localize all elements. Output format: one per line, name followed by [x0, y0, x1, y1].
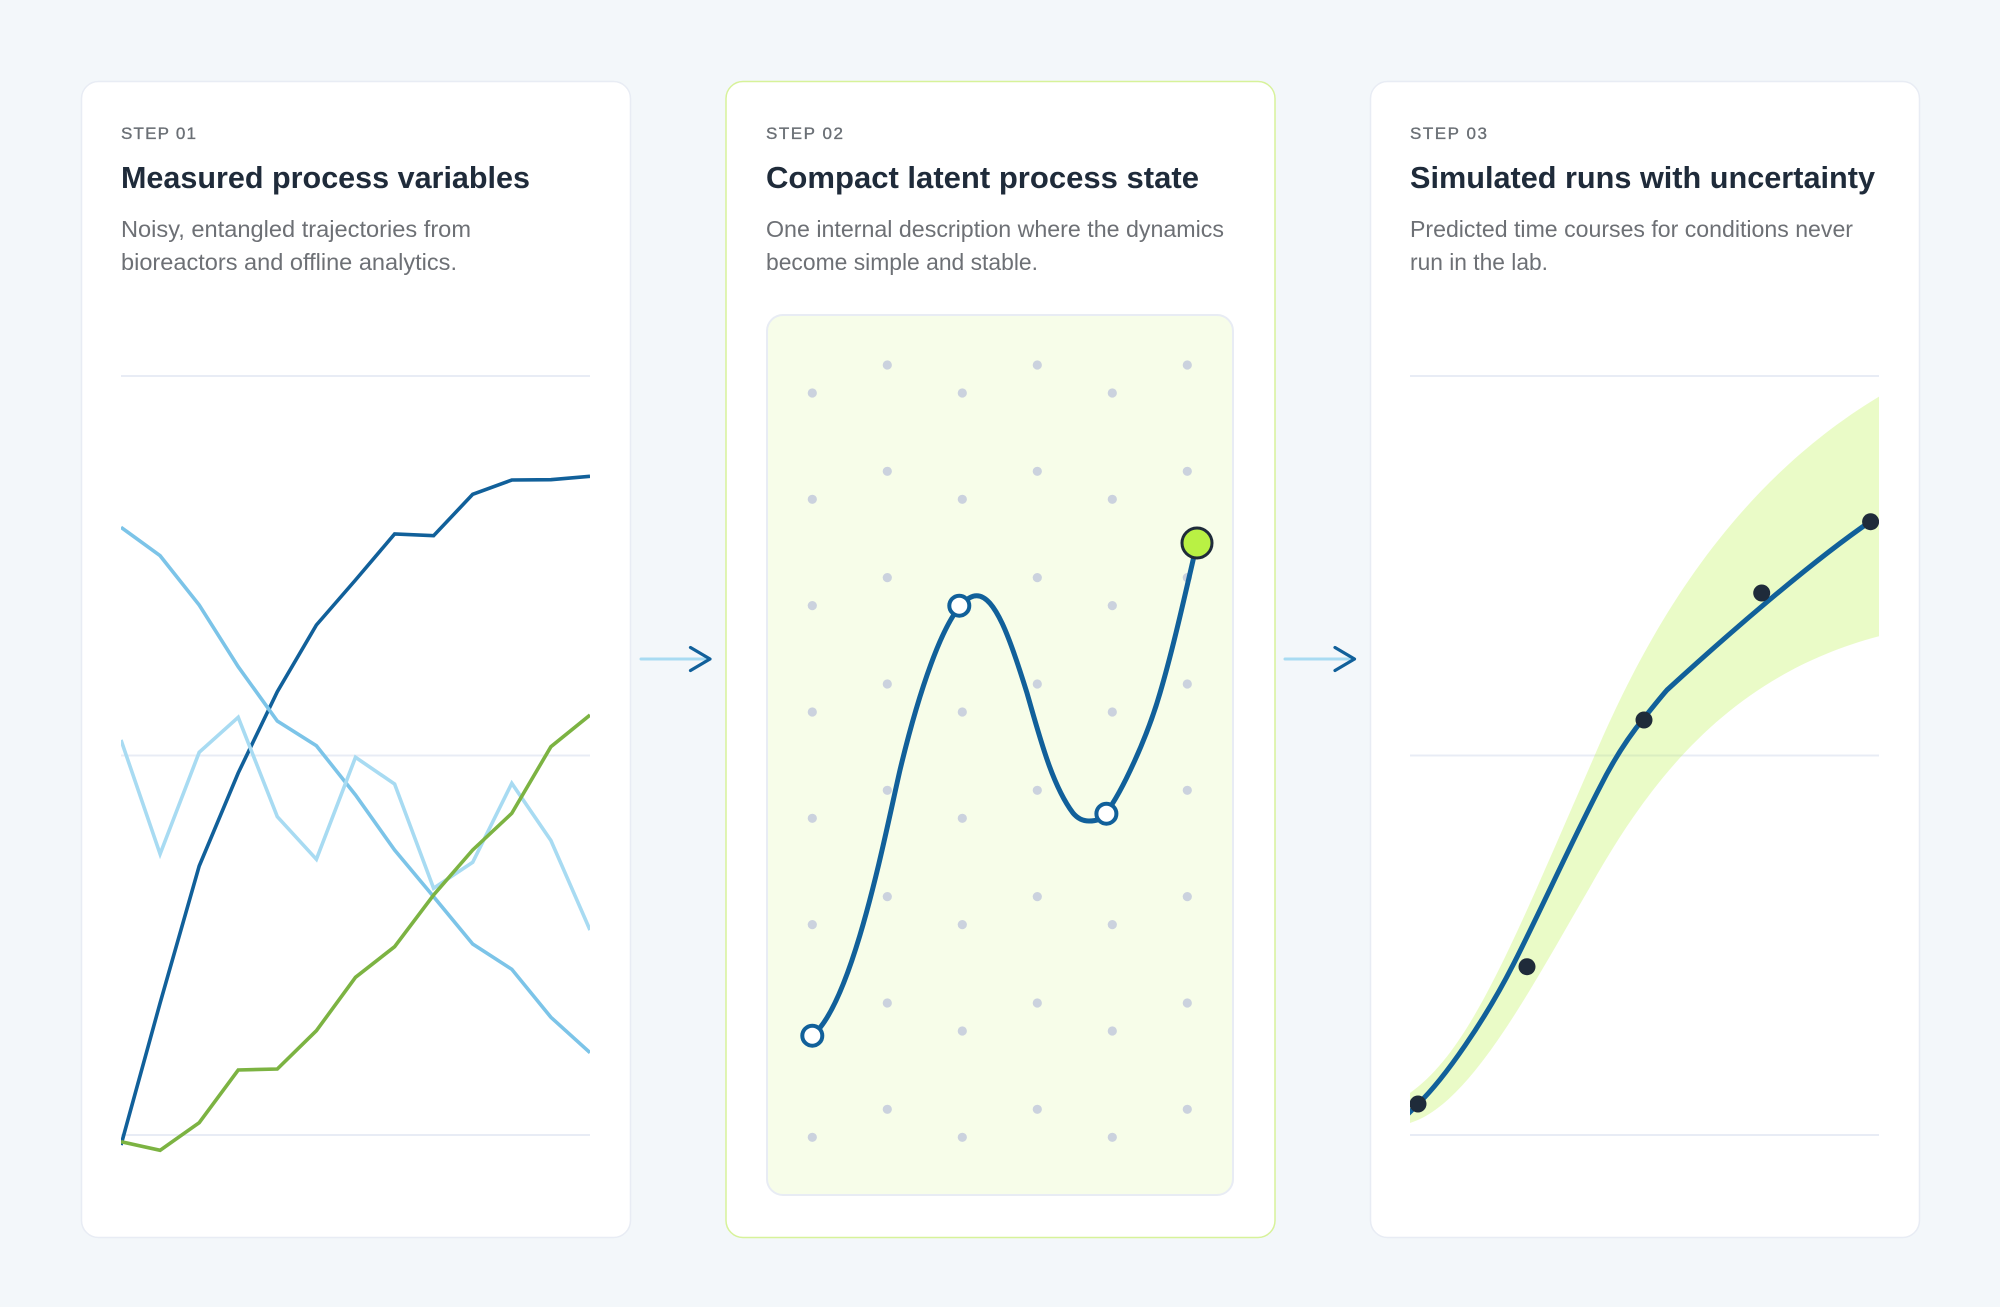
heading: measured process variables: Measured process variables [121, 160, 530, 195]
panel: step 02 compact latent process state [726, 82, 1275, 1238]
latent space panel with dot lattice and trajectory [767, 315, 1233, 1195]
trajectory nodes [802, 596, 1116, 1046]
description: step 02: One internal description where the dynamics [766, 216, 1224, 242]
step label 03: STEP 03 [1410, 124, 1487, 143]
description: step 02 [766, 216, 1224, 275]
line chart: noisy process variables [121, 376, 590, 1150]
arrow: step 02 to step 03 [1285, 648, 1354, 670]
step label 02: STEP 02 [766, 124, 843, 143]
heading: compact latent process state: Compact latent process state [766, 160, 1199, 195]
end state marker [1182, 528, 1212, 558]
description: step 02: become simple and stable. [766, 249, 1038, 275]
panel: step 01 measured process variables [82, 82, 630, 1238]
description: step 01: Noisy, entangled trajectories from [121, 216, 471, 242]
uncertainty band [1410, 396, 1880, 1123]
panel: step 03 simulated runs with uncertainty [1370, 82, 1920, 1238]
heading: simulated runs with uncertainty: Simulated runs with uncertainty [1410, 160, 1876, 195]
description: step 03 [1410, 216, 1853, 275]
arrow: step 01 to step 02 [641, 648, 710, 670]
step label 01: STEP 01 [121, 124, 196, 143]
description: step 03: Predicted time courses for conditions never [1410, 216, 1853, 242]
forecast chart with uncertainty band [1404, 376, 1880, 1135]
latent trajectory curve [812, 543, 1197, 1036]
description: step 01 [121, 216, 471, 275]
mean prediction line [1404, 521, 1871, 1118]
description: step 03: run in the lab. [1410, 249, 1548, 275]
description: step 01: bioreactors and offline analytics. [121, 249, 457, 275]
observation points [1410, 513, 1879, 1112]
